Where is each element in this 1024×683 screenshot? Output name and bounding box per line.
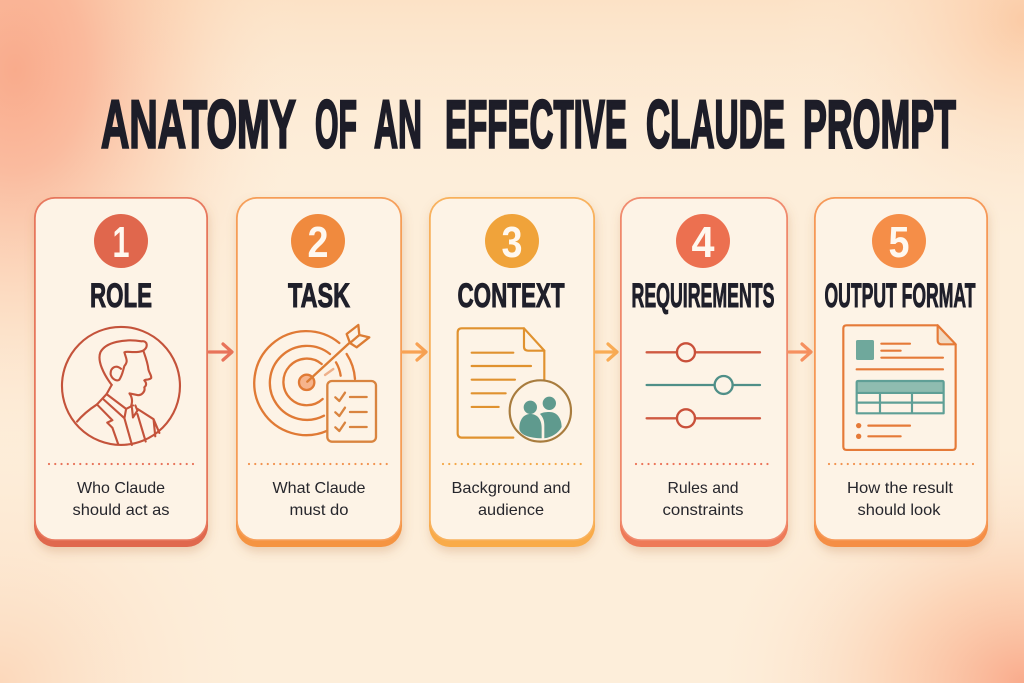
panel: role xyxy=(34,197,208,547)
description: context: audience xyxy=(478,502,544,519)
number badge 4 xyxy=(676,214,730,268)
arrow 2 to 3 xyxy=(403,344,426,360)
heading: role: ROLE xyxy=(90,277,152,315)
arrow 4 to 5 xyxy=(789,344,811,360)
icon: formatted document xyxy=(843,325,956,450)
panel: context xyxy=(429,197,595,547)
heading: task: TASK xyxy=(288,277,350,315)
title xyxy=(101,86,956,162)
card 1 frame xyxy=(34,197,208,547)
number badge 5 xyxy=(872,214,926,268)
panel: requirements xyxy=(620,197,788,547)
icon: sliders xyxy=(647,343,760,427)
arrow 3 to 4 xyxy=(596,344,617,360)
description: context xyxy=(452,480,570,519)
description: role: Who Claude xyxy=(77,480,165,497)
number badge 4: 4 xyxy=(692,218,715,267)
description: requirements: constraints xyxy=(662,502,744,519)
heading: requirements: REQUIREMENTS xyxy=(632,277,774,315)
title: CLAUDE xyxy=(646,86,785,162)
description: role xyxy=(72,480,170,519)
arrow 1 to 2 xyxy=(209,344,232,360)
panel: task xyxy=(236,197,402,547)
description: output format xyxy=(847,480,954,519)
card 2 frame xyxy=(236,197,402,547)
description: output format: How the result xyxy=(847,480,954,497)
icon: document with audience xyxy=(458,328,571,442)
heading: context: CONTEXT xyxy=(458,277,565,315)
panel: output format xyxy=(814,197,988,547)
description: requirements xyxy=(662,480,744,519)
divider dots 2 xyxy=(249,463,390,465)
description: task: must do xyxy=(290,502,349,519)
icon: target and checklist xyxy=(254,325,376,442)
card 4 frame xyxy=(620,197,788,547)
title: EFFECTIVE xyxy=(445,86,627,162)
description: task: What Claude xyxy=(272,480,366,497)
description: output format: should look xyxy=(858,502,942,519)
number badge 2 xyxy=(291,214,345,268)
number badge 3 xyxy=(485,214,539,268)
divider dots 3 xyxy=(443,463,581,465)
card 5 frame xyxy=(814,197,988,547)
number badge 2: 2 xyxy=(308,218,328,267)
divider dots 4 xyxy=(636,463,772,465)
title: AN xyxy=(374,86,422,162)
number badge 5: 5 xyxy=(888,218,910,267)
number badge 3: 3 xyxy=(502,218,522,267)
number badge 1 xyxy=(94,214,148,268)
title: OF xyxy=(315,86,357,162)
description: context: Background and xyxy=(452,480,570,497)
description: task xyxy=(272,480,366,519)
number badge 1: 1 xyxy=(112,218,130,267)
icon: person portrait xyxy=(62,327,180,445)
divider dots 1 xyxy=(49,463,193,465)
title: ANATOMY xyxy=(101,86,296,162)
description: requirements: Rules and xyxy=(668,480,738,497)
card 3 frame xyxy=(429,197,595,547)
divider dots 5 xyxy=(829,463,973,465)
description: role: should act as xyxy=(72,502,170,519)
